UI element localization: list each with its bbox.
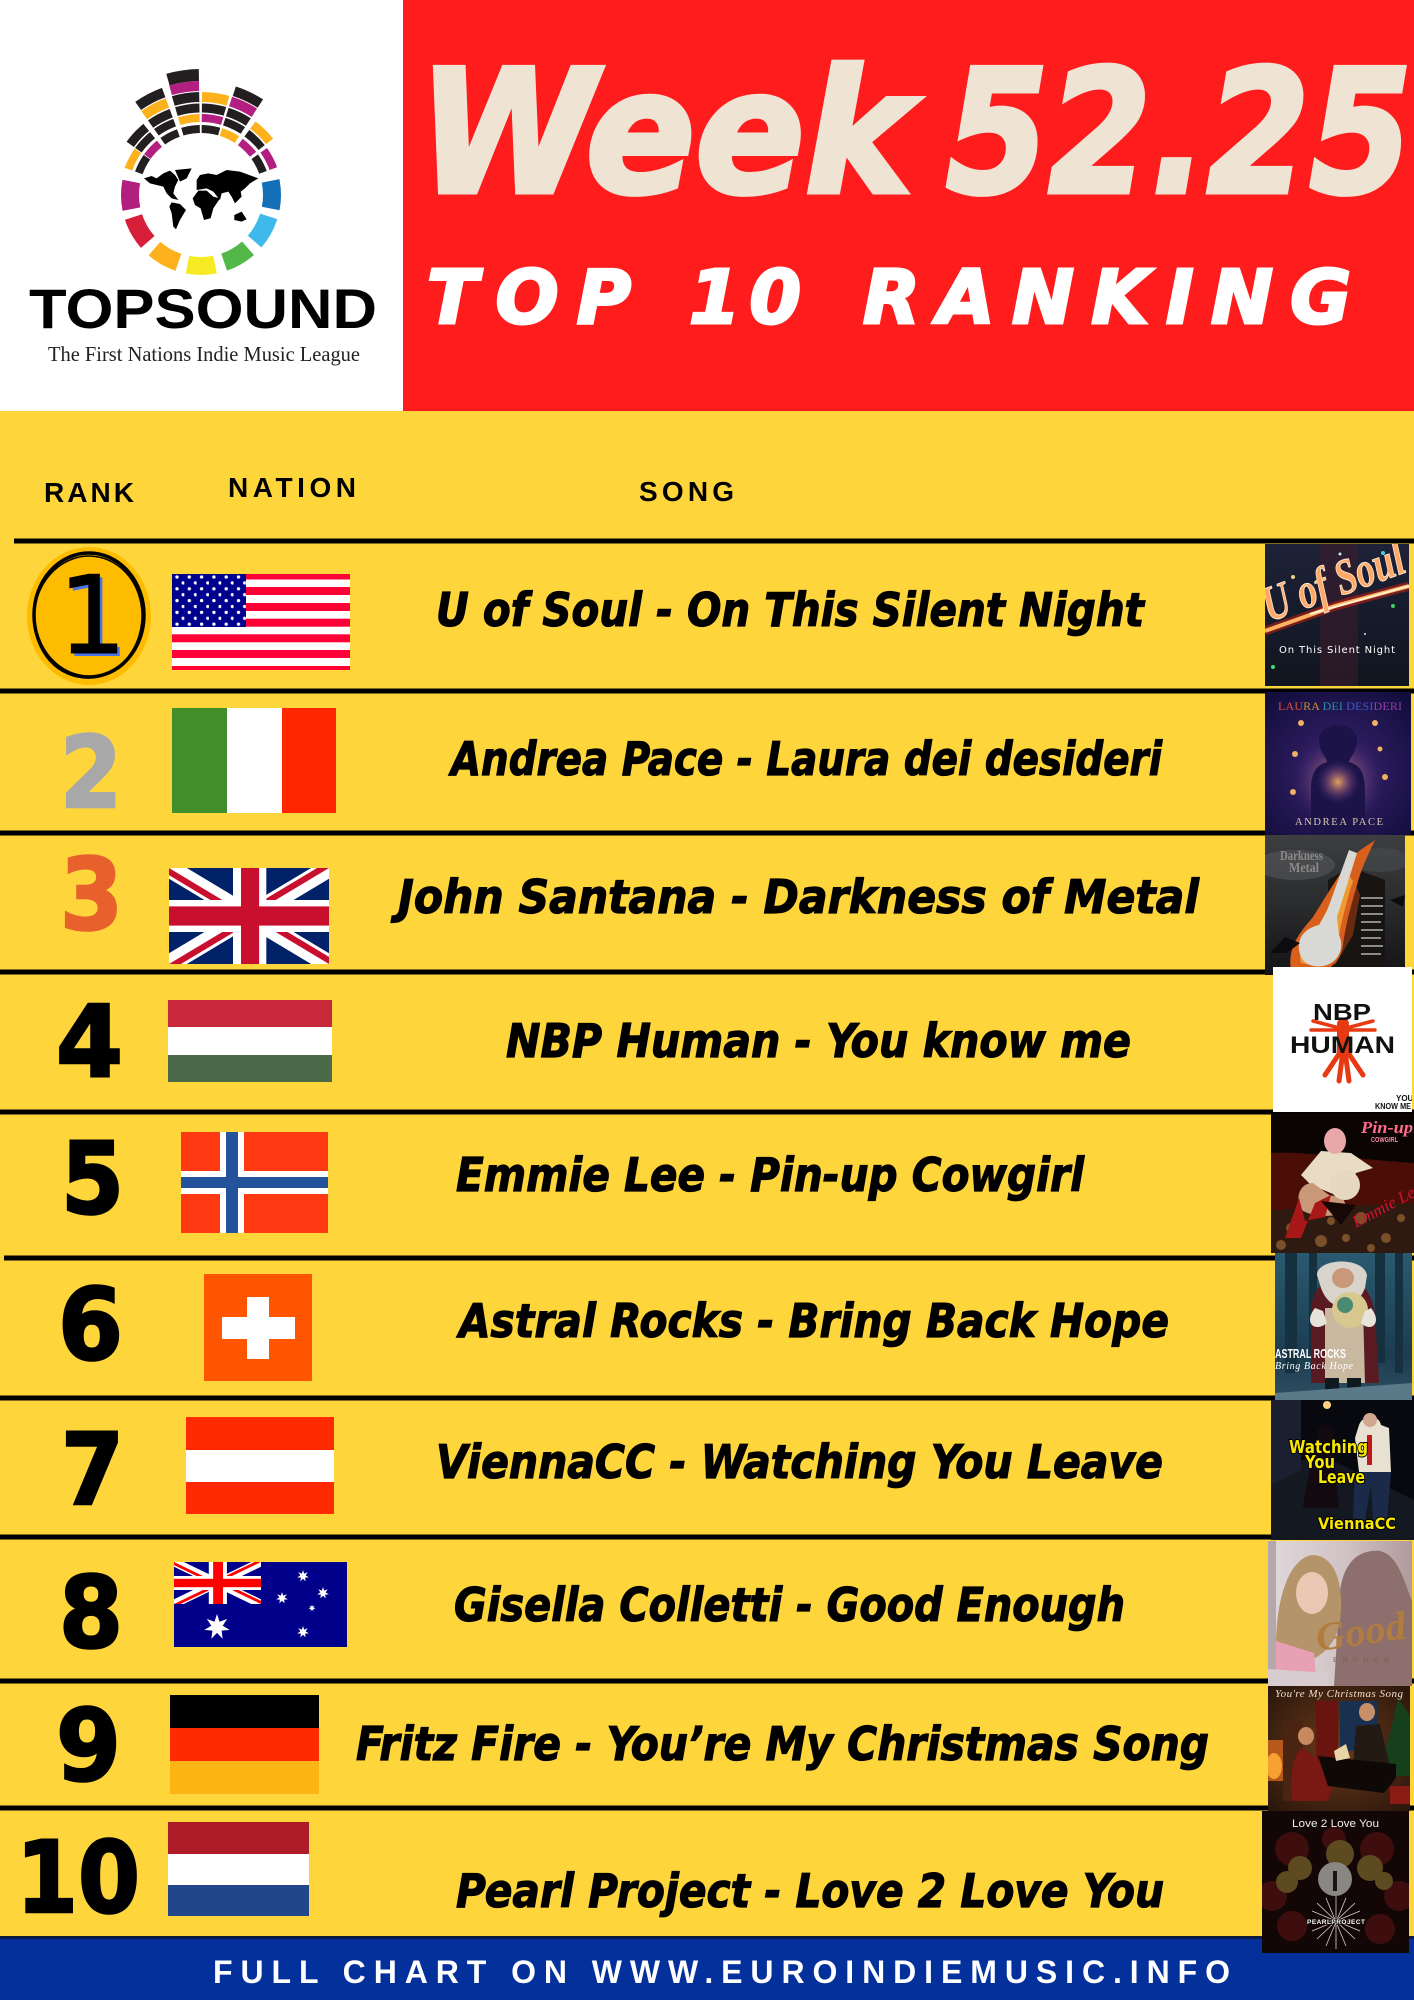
album cover 10 <box>1262 1811 1409 1953</box>
album cover 5 <box>1271 1113 1414 1253</box>
flag: Switzerland <box>204 1274 312 1381</box>
flag: Netherlands <box>168 1822 309 1916</box>
flag: USA <box>172 574 350 670</box>
album cover 6: Bring Back Hope <box>1275 1361 1354 1372</box>
song title 8: Gisella Colletti - Good Enough <box>454 1578 1125 1632</box>
album cover 2: ANDREA PACE <box>1295 817 1383 828</box>
album cover 2: LAURA DEI DESIDERI <box>1278 699 1402 713</box>
flag: Australia <box>174 1562 347 1647</box>
song title 7: ViennaCC - Watching You Leave <box>436 1435 1163 1489</box>
song title 2: Andrea Pace - Laura dei desideri <box>448 732 1163 786</box>
album cover 7: Leave <box>1318 1467 1365 1488</box>
title: week number <box>418 34 1412 233</box>
song title 4: NBP Human - You know me <box>506 1014 1131 1068</box>
title: week number: Week <box>418 34 921 233</box>
album cover 1 <box>1254 529 1412 686</box>
album cover 8: Good <box>1313 1603 1409 1660</box>
album cover 1: On This Silent Night <box>1279 645 1395 656</box>
song title 6: Astral Rocks - Bring Back Hope <box>456 1294 1169 1348</box>
album cover 7: Watching <box>1289 1437 1368 1458</box>
rank 8: 8 <box>59 1556 123 1671</box>
song title 10: Pearl Project - Love 2 Love You <box>456 1864 1164 1918</box>
song title 9: Fritz Fire - You’re My Christmas Song <box>356 1717 1209 1771</box>
column headers <box>44 472 734 508</box>
column headers: SONG <box>639 476 734 507</box>
album cover 4: KNOW ME <box>1375 1102 1412 1111</box>
footer text: FULL CHART ON WWW.EUROINDIEMUSIC.INFO <box>213 1954 1230 1990</box>
column headers: RANK <box>44 477 134 508</box>
album cover 2 <box>1265 692 1411 835</box>
rank 7: 7 <box>61 1413 124 1528</box>
album cover 7: You <box>1304 1452 1335 1473</box>
song title 1: U of Soul - On This Silent Night <box>436 583 1146 637</box>
album cover 4: NBP <box>1313 999 1371 1025</box>
flag: Austria <box>186 1417 334 1514</box>
flag: Germany <box>170 1695 319 1794</box>
row divider lines <box>0 538 1414 1810</box>
song title 5: Emmie Lee - Pin-up Cowgirl <box>456 1148 1085 1202</box>
album cover 4: HUMAN <box>1290 1032 1395 1059</box>
subtitle: top 10 ranking: TOP <box>427 255 631 341</box>
flag: Norway <box>181 1132 328 1233</box>
album cover 4: YOU <box>1396 1094 1414 1103</box>
song title 3: John Santana - Darkness of Metal <box>391 870 1200 924</box>
column headers: NATION <box>228 472 356 503</box>
logo tagline: The First Nations Indie Music League <box>48 342 360 366</box>
album cover 9 <box>1268 1686 1410 1811</box>
rank 2: 2 <box>60 716 122 831</box>
album cover 7 <box>1271 1400 1414 1540</box>
rank 5: 5 <box>61 1122 124 1237</box>
footer bar <box>0 1936 1414 2000</box>
subtitle: top 10 ranking: 10 <box>689 255 801 341</box>
album cover 8: ENOUGH <box>1333 1656 1389 1664</box>
flag: Italy <box>172 708 336 813</box>
subtitle: top 10 ranking <box>427 255 1351 341</box>
rank 9: 9 <box>56 1689 121 1804</box>
album cover 6: ASTRAL ROCKS <box>1275 1346 1346 1361</box>
album cover 4 <box>1273 967 1414 1112</box>
flag: United Kingdom <box>169 868 329 964</box>
album cover 8 <box>1268 1541 1412 1686</box>
logo wordmark: TOPSOUND <box>29 277 377 340</box>
flag: Hungary <box>168 1000 332 1082</box>
album cover 9: You're My Christmas Song <box>1275 1688 1404 1700</box>
album cover 7: ViennaCC <box>1318 1514 1396 1533</box>
album cover 5: COWGIRL <box>1371 1137 1399 1144</box>
album cover 6 <box>1275 1253 1412 1400</box>
rank 3: 3 <box>60 838 123 953</box>
rank 1 badge: 1 <box>58 554 127 679</box>
album cover 3 <box>1265 835 1405 975</box>
album cover 5: Pin-up <box>1360 1118 1413 1137</box>
album cover 3: Darkness <box>1280 849 1323 864</box>
rank 4: 4 <box>56 985 123 1100</box>
album cover 10: Love 2 Love You <box>1292 1818 1379 1830</box>
rank 6: 6 <box>58 1268 123 1383</box>
logo emblem: colour ring, equalizer arcs and world map <box>49 43 353 347</box>
logo panel <box>0 0 403 411</box>
title banner <box>403 0 1414 411</box>
rank 10: 10 <box>16 1821 140 1936</box>
rank 1 badge <box>27 547 151 685</box>
subtitle: top 10 ranking: RANKING <box>863 255 1351 341</box>
rank 1 badge: 1 <box>61 557 130 682</box>
album cover 3: Metal <box>1289 861 1319 876</box>
album cover 10: PEARLPROJECT <box>1307 1919 1365 1926</box>
